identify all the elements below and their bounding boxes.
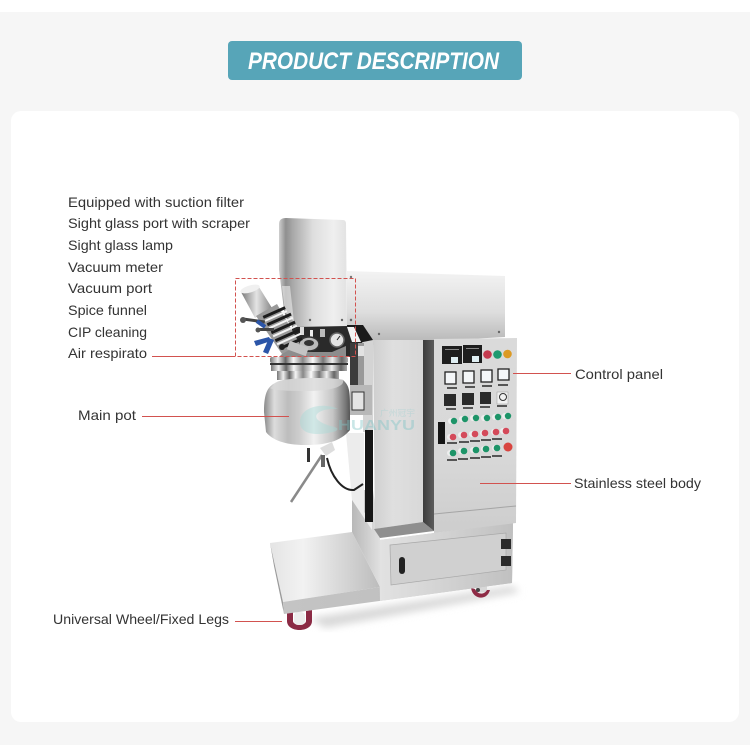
dashed callout box [236, 278, 356, 356]
timer dial [497, 392, 508, 404]
cabinet door [390, 533, 506, 585]
dome [278, 346, 346, 358]
main pot body [264, 378, 350, 445]
pot flange [270, 357, 348, 380]
watermark: 广州冠宇 [380, 408, 415, 418]
title banner [228, 41, 522, 80]
white content panel [11, 111, 739, 722]
vacuum gauge [330, 333, 344, 347]
control cabinet [423, 338, 517, 533]
cover lower highlight [282, 286, 294, 322]
suction filter and valves [239, 283, 309, 356]
top indicator buttons [483, 350, 512, 359]
machine illustration [239, 218, 520, 630]
pot shoulder highlight [270, 378, 343, 391]
column recess floor [374, 522, 434, 538]
spice funnel valve [299, 337, 319, 351]
green switch row [451, 413, 511, 424]
side key slot [438, 422, 445, 444]
column front face [373, 340, 423, 529]
lower green switch row [450, 445, 500, 456]
callout list: head fittings: Equipped with suction filter [68, 194, 244, 210]
callout list: head fittings: Air respirato [68, 345, 147, 361]
wheel: front universal [287, 610, 312, 630]
rear housing panel [347, 271, 505, 345]
base plate [270, 532, 380, 614]
leader: head fittings [152, 356, 235, 358]
watermark [300, 406, 415, 434]
main column [346, 340, 434, 587]
cover bolts [309, 319, 352, 321]
bracket on column [350, 385, 372, 415]
callout list: head fittings: Vacuum meter [68, 259, 163, 275]
switch captions [446, 384, 508, 461]
callout: wheels: Universal Wheel/Fixed Legs [53, 611, 229, 627]
blue valve handles [254, 319, 274, 354]
discharge hardware and hose [291, 442, 363, 502]
callout list: head fittings: Vacuum port [68, 280, 152, 296]
temperature controllers [442, 345, 482, 364]
callout: main pot: Main pot [78, 407, 136, 423]
callout list: head fittings: Sight glass port with scraper [68, 215, 250, 231]
callout list: head fittings: Sight glass lamp [68, 237, 173, 253]
callout list: head fittings: Spice funnel [68, 302, 147, 318]
cabinet [283, 523, 513, 614]
motor cover [279, 218, 347, 327]
switch stems [447, 413, 508, 456]
callout: control panel: Control panel [575, 366, 663, 382]
hinges [501, 539, 511, 566]
digital displays [444, 392, 491, 406]
title banner: PRODUCT DESCRIPTION [248, 48, 500, 75]
floor shadow [310, 586, 520, 628]
analog meters [445, 369, 509, 384]
callout list: head fittings [68, 194, 250, 361]
watermark: HUANYU [338, 417, 415, 434]
head mechanism [278, 325, 373, 387]
door handle [399, 557, 405, 574]
callout: stainless steel body: Stainless steel body [574, 475, 701, 491]
red switch row [450, 428, 509, 440]
wheel: rear [471, 582, 490, 598]
callout list: head fittings: CIP cleaning [68, 324, 147, 340]
emergency stop [504, 442, 512, 452]
